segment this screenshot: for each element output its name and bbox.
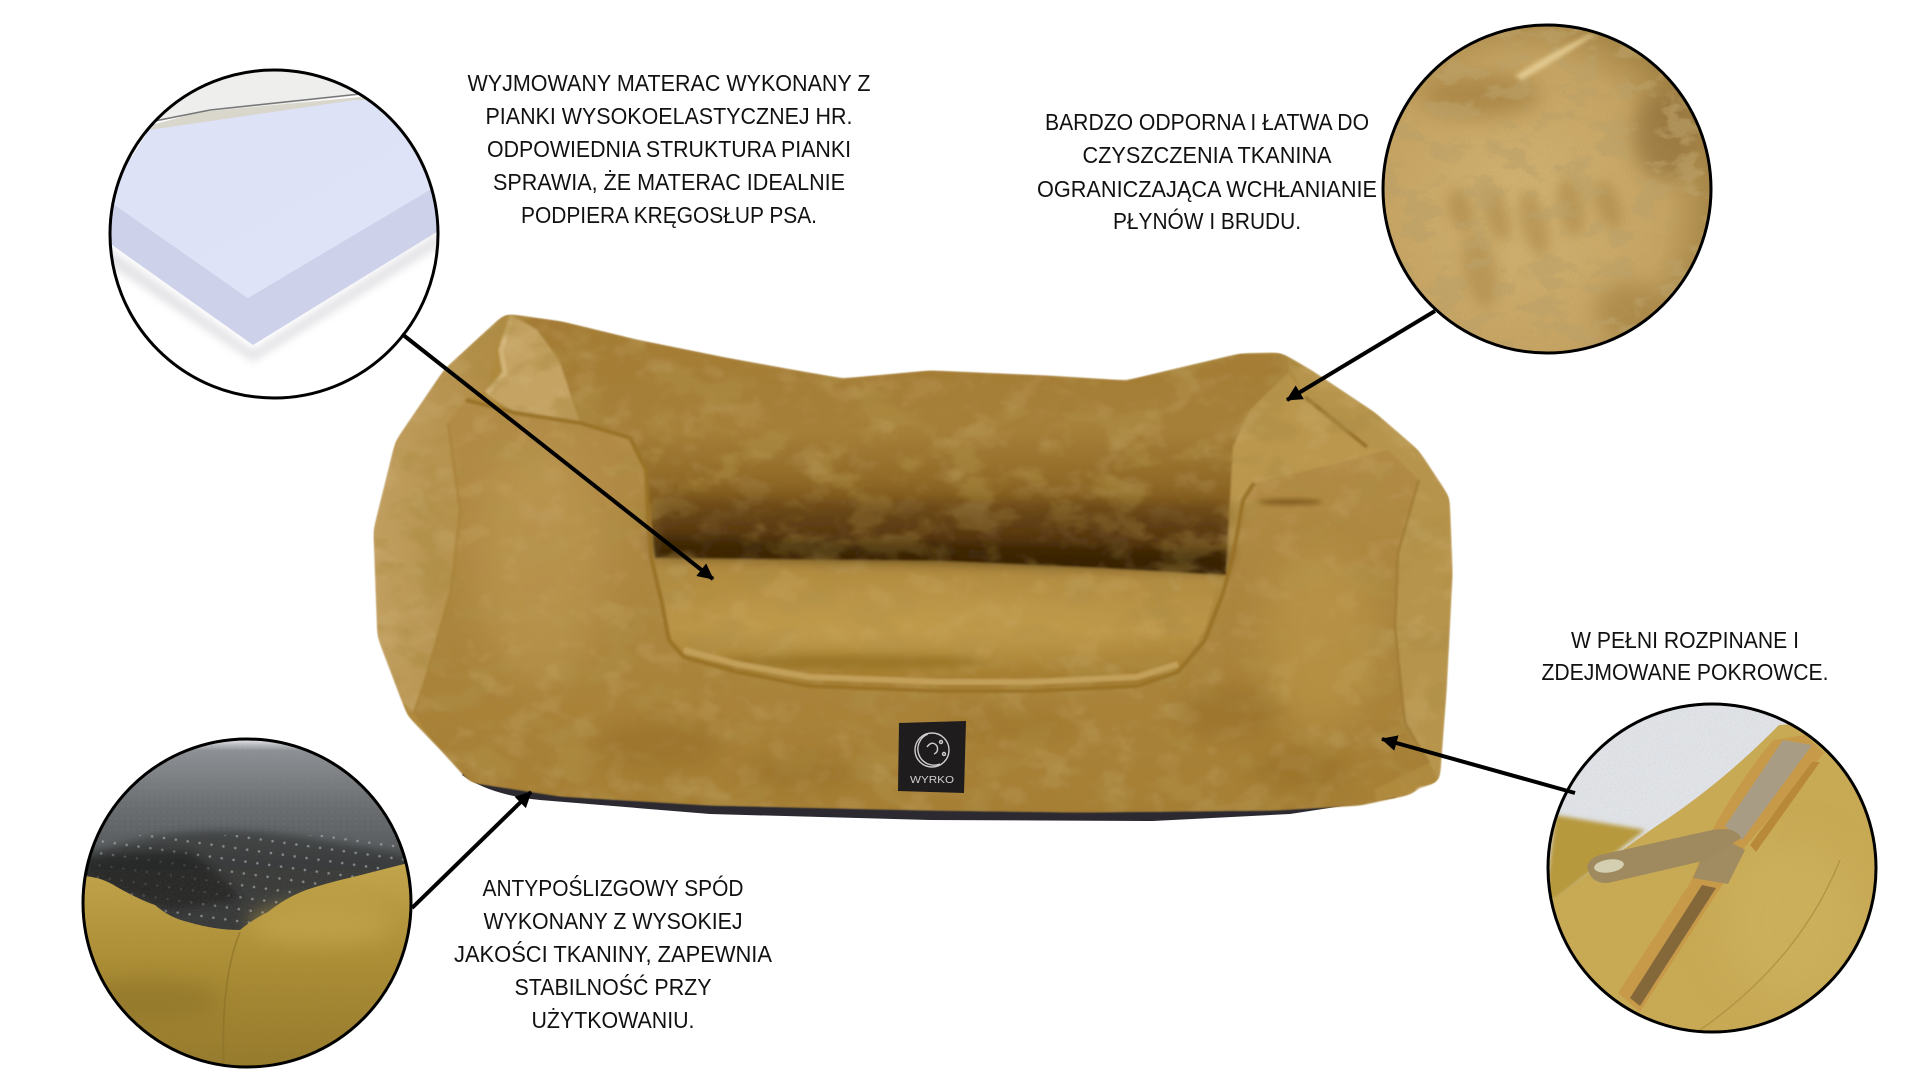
brand label bbox=[898, 721, 966, 793]
back wall bbox=[505, 313, 1288, 575]
circle outline bbox=[1548, 704, 1876, 1032]
text: zipper description bbox=[1542, 627, 1828, 685]
right piping seam bbox=[1305, 397, 1367, 447]
seams bbox=[414, 423, 460, 712]
text: underside description bbox=[454, 874, 773, 1033]
fabric crease bbox=[1515, 33, 1597, 80]
text: underside description: ANTYPOŚLIZGOWY SPÓD bbox=[482, 874, 744, 901]
seat cushion bbox=[655, 558, 1219, 687]
text: zipper description: W PEŁNI ROZPINANE I bbox=[1571, 627, 1799, 653]
outer left side panel bbox=[370, 313, 505, 712]
photo circle: zipper close-up bbox=[1545, 700, 1885, 1040]
blurred background fabric bbox=[1545, 815, 1645, 900]
logo mark bbox=[915, 733, 949, 767]
text: fabric description: PŁYNÓW I BRUDU. bbox=[1113, 208, 1301, 234]
circle outline bbox=[83, 739, 411, 1067]
fabric body bbox=[1545, 720, 1885, 1040]
text: fabric description: BARDZO ODPORNA I ŁATWA DO bbox=[1045, 109, 1369, 135]
right inner cushion panel bbox=[1226, 373, 1388, 573]
dog bed product photo bbox=[360, 300, 1470, 830]
mattress top bbox=[105, 100, 450, 298]
arrow: mattress bbox=[402, 334, 713, 579]
dark fabric wave bbox=[96, 828, 401, 861]
photo circle: velvet fabric close-up bbox=[1380, 20, 1715, 360]
circle outline bbox=[110, 70, 438, 398]
non-slip base strip bbox=[462, 762, 1415, 821]
seam stitch bbox=[1700, 860, 1840, 1030]
arrow: zipper bbox=[1382, 739, 1575, 793]
text: mattress description: PIANKI WYSOKOELASTYCZNEJ HR. bbox=[486, 103, 852, 129]
circle outline bbox=[1383, 25, 1711, 353]
arrow: non-slip base bbox=[412, 792, 531, 908]
dark patches bbox=[1420, 73, 1540, 117]
text: mattress description: WYJMOWANY MATERAC WYKONANY Z bbox=[468, 70, 870, 96]
text: underside description: WYKONANY Z WYSOKIEJ bbox=[484, 908, 742, 934]
text: zipper description: ZDEJMOWANE POKROWCE. bbox=[1542, 659, 1828, 685]
velvet mottling texture bbox=[360, 300, 1470, 830]
zipper teeth bbox=[1630, 885, 1716, 1006]
rubber dots bbox=[86, 835, 404, 924]
text: fabric description: OGRANICZAJĄCA WCHŁANIANIE bbox=[1037, 176, 1377, 202]
text: mattress description: PODPIERA KRĘGOSŁUP PSA. bbox=[521, 202, 817, 228]
brand name: WYRKO bbox=[910, 775, 954, 786]
text: underside description: STABILNOŚĆ PRZY bbox=[514, 973, 712, 1000]
photo circle: non-slip underside bbox=[80, 739, 415, 1070]
zipper opening bbox=[1725, 740, 1812, 840]
mattress shadow bbox=[105, 232, 440, 362]
zipper tape bbox=[1618, 735, 1824, 1012]
bed fabric panels bbox=[360, 300, 1470, 830]
mustard bed corner bbox=[80, 862, 412, 1070]
front lip and arm piping bbox=[466, 400, 1254, 691]
text: mattress description: ODPOWIEDNIA STRUKTURA PIANKI bbox=[487, 136, 851, 162]
dark fabric fold bbox=[84, 852, 240, 910]
pillow edge bbox=[159, 72, 358, 120]
text: mattress description bbox=[468, 70, 870, 228]
pull tab bbox=[1587, 829, 1741, 883]
photo circle: foam mattress bbox=[108, 68, 440, 400]
text: fabric description: CZYSZCZENIA TKANINA bbox=[1082, 142, 1332, 168]
text: underside description: UŻYTKOWANIU. bbox=[532, 1007, 694, 1033]
arrow: fabric bbox=[1287, 311, 1435, 400]
text: underside description: JAKOŚCI TKANINY, ZAPEWNIA bbox=[454, 940, 773, 967]
right outer side panel bbox=[1288, 365, 1456, 790]
slider bbox=[1693, 844, 1745, 884]
left cushion piping bbox=[487, 315, 512, 393]
front panel and arms bbox=[414, 400, 1429, 816]
mattress side bbox=[105, 183, 440, 345]
shadows and highlights bbox=[475, 440, 1375, 792]
left inner cushion panel bbox=[487, 315, 580, 423]
tab hole bbox=[1594, 859, 1624, 873]
text: fabric description bbox=[1037, 109, 1377, 234]
text: mattress description: SPRAWIA, ŻE MATERAC IDEALNIE bbox=[493, 169, 845, 195]
